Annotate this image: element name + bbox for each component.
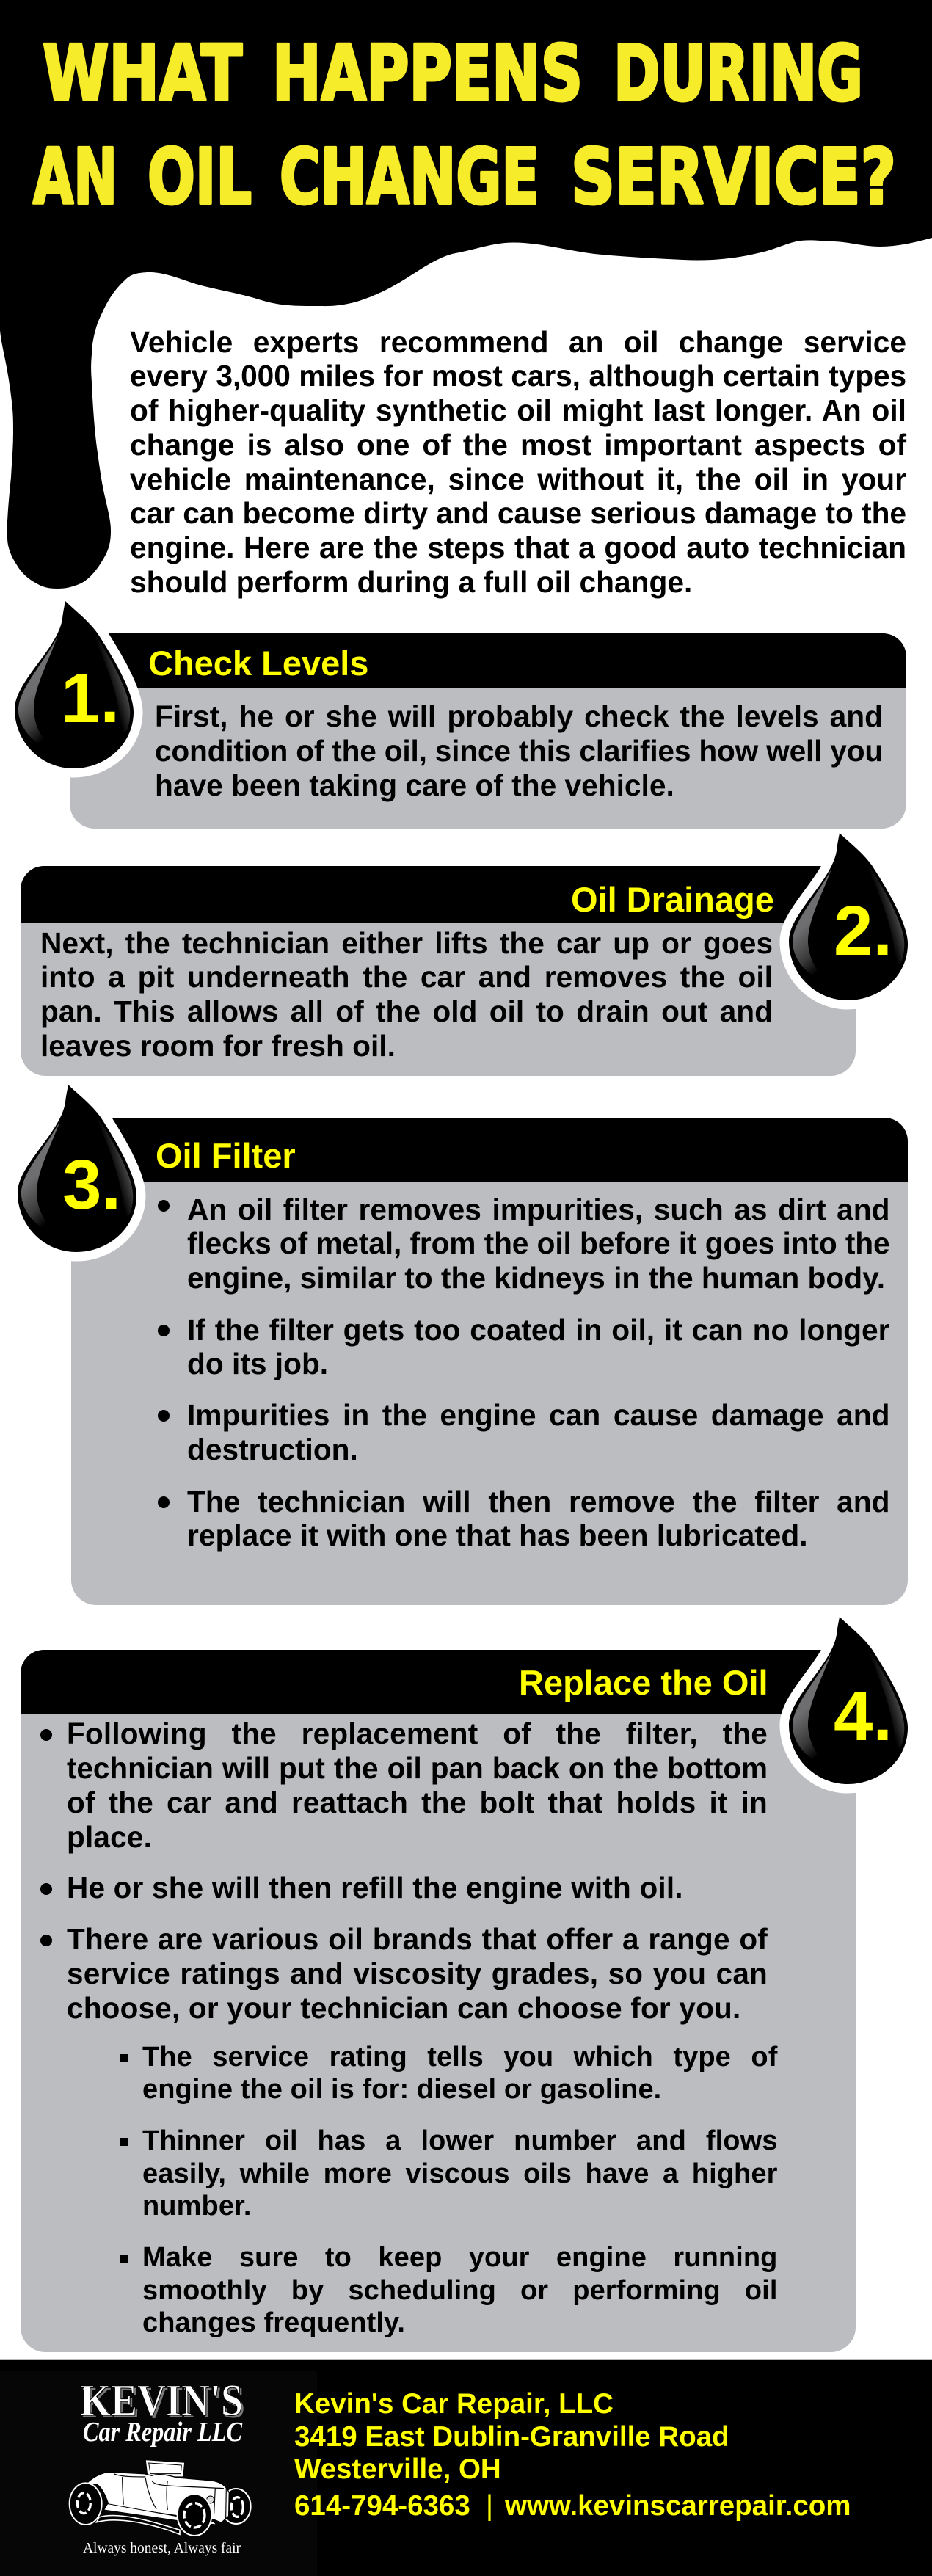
intro text: of higher-quality synthetic oil might last longer. An oil <box>130 393 906 427</box>
sub-bullet 3 <box>120 2255 128 2263</box>
panel: step 4 replace the oil <box>21 1617 908 2352</box>
sub-bullet text 1: The service rating tells you which type of <box>142 2042 778 2073</box>
bullet 3 <box>158 1410 170 1422</box>
logo wordmark KEVIN'S: KEVIN'S <box>82 2379 245 2428</box>
body text: pan. This allows all of the old oil to drain out and <box>40 994 773 1028</box>
body text <box>155 699 883 802</box>
bullet 1 <box>158 1200 170 1212</box>
bullet text 1: An oil filter removes impurities, such as dirt and <box>187 1192 889 1226</box>
body background <box>21 923 856 1076</box>
bullet text 1 <box>187 1192 889 1295</box>
heading: Oil Filter <box>156 1136 296 1175</box>
logo wordmark KEVIN'S: KEVIN'S <box>80 2376 243 2426</box>
bullet text 1: Following the replacement of the filter, the <box>67 1717 768 1750</box>
body background <box>70 688 906 829</box>
bullet 1 <box>40 1729 52 1741</box>
icon: oil drop number 2: 2. <box>834 892 892 970</box>
bullet text 4: The technician will then remove the filter and <box>187 1484 889 1518</box>
bullet text 1: technician will put the oil pan back on the bottom <box>67 1751 768 1785</box>
intro text: engine. Here are the steps that a good auto technician <box>130 531 906 564</box>
header bar <box>21 866 856 923</box>
contact: address: 3419 East Dublin-Granville Road <box>294 2421 729 2453</box>
intro text: car can become dirty and cause serious damage to the <box>130 496 906 530</box>
sub-bullet text 2: number. <box>142 2191 252 2222</box>
contact: phone and website: 614-794-6363 <box>294 2490 470 2522</box>
bullet text 1: engine, similar to the kidneys in the human body. <box>187 1261 885 1295</box>
icon: oil drop number 1: 1. <box>61 659 120 738</box>
bullet text 3 <box>187 1398 889 1466</box>
bullet text 4: replace it with one that has been lubricated. <box>187 1518 808 1552</box>
bullet text 3: choose, or your technician can choose for you. <box>67 1991 740 2025</box>
sub-bullet text 3: changes frequently. <box>142 2307 405 2338</box>
bullet text 3 <box>67 1922 768 2025</box>
bullet text 3: There are various oil brands that offer a range of <box>67 1922 768 1956</box>
logo tagline: Always honest, Always fair <box>83 2540 241 2556</box>
intro text <box>130 324 907 599</box>
panel: step 1 check levels <box>15 601 906 829</box>
body text: have been taking care of the vehicle. <box>155 768 674 802</box>
bullet text 2: If the filter gets too coated in oil, it can no longer <box>187 1312 889 1346</box>
bullet 3 <box>40 1935 52 1946</box>
icon: oil drop number 2 <box>779 833 908 1010</box>
header bar <box>71 1118 908 1182</box>
sub-bullet text 1: engine the oil is for: diesel or gasoline. <box>142 2074 661 2105</box>
contact: company name: Kevin's Car Repair, LLC <box>294 2388 614 2420</box>
bullet text 2 <box>187 1312 889 1380</box>
bullet text 1 <box>67 1717 768 1854</box>
header bar <box>21 1650 856 1714</box>
bullet text 3: service ratings and viscosity grades, so you can <box>67 1957 768 1990</box>
body text <box>40 926 773 1063</box>
bullet text 1: place. <box>67 1820 152 1854</box>
sub-bullet text 3: smoothly by scheduling or performing oil <box>142 2275 778 2306</box>
contact: city: Westerville, OH <box>294 2453 501 2485</box>
panel: step 3 oil filter <box>18 1085 908 1605</box>
body text: First, he or she will probably check the levels and <box>155 699 883 733</box>
intro text: every 3,000 miles for most cars, although certain types <box>130 359 906 393</box>
sub-bullet 2 <box>120 2138 128 2146</box>
sub-bullet text 2: easily, while more viscous oils have a higher <box>142 2158 778 2188</box>
panel: step 2 oil drainage <box>21 833 908 1076</box>
bullet text 2: do its job. <box>187 1347 328 1380</box>
bullet text 3: destruction. <box>187 1433 358 1466</box>
contact: phone and website <box>294 2490 851 2522</box>
icon: oil drop number 3 <box>18 1085 145 1261</box>
oil spill header background <box>0 0 932 589</box>
contact: phone and website: www.kevinscarrepair.com <box>505 2490 851 2522</box>
sub-bullet text 2 <box>142 2125 778 2222</box>
icon: oil drop number 4 <box>779 1617 908 1794</box>
bullet text 3: Impurities in the engine can cause damage and <box>187 1398 889 1432</box>
bullet text 1: of the car and reattach the bolt that holds it in <box>67 1786 768 1819</box>
bullet 4 <box>158 1496 170 1508</box>
body background <box>21 1713 856 2352</box>
bullet 2 <box>158 1325 170 1336</box>
logo: Kevin's Car Repair <box>69 2376 252 2556</box>
sub-bullet text 3: Make sure to keep your engine running <box>142 2242 778 2273</box>
body text: condition of the oil, since this clarifies how well you <box>155 734 883 768</box>
sub-bullet text 1 <box>142 2042 778 2105</box>
heading: Oil Drainage <box>571 880 774 919</box>
contact: phone and website: | <box>486 2490 493 2522</box>
intro text: should perform during a full oil change. <box>130 565 692 599</box>
heading: Replace the Oil <box>519 1663 768 1702</box>
sub-bullet text 3 <box>142 2242 778 2338</box>
title <box>32 37 896 213</box>
intro text: change is also one of the most important aspects of <box>130 428 906 462</box>
body text: Next, the technician either lifts the car up or goes <box>40 926 773 960</box>
bullet 2 <box>40 1883 52 1895</box>
footer <box>0 2359 932 2576</box>
header bar <box>71 633 906 688</box>
intro text: Vehicle experts recommend an oil change service <box>130 324 906 358</box>
body text: into a pit underneath the car and removes the oil <box>40 960 773 994</box>
bullet text 4 <box>187 1484 889 1552</box>
icon: oil drop number 1 <box>15 601 142 778</box>
body background <box>71 1182 908 1605</box>
sub-bullet 1 <box>120 2054 128 2062</box>
bullet text 1: flecks of metal, from the oil before it goes into the <box>187 1226 889 1260</box>
icon: hot rod car <box>70 2461 251 2536</box>
bullet text 2: He or she will then refill the engine with oil. <box>67 1871 683 1904</box>
logo script Car Repair LLC: Car Repair LLC <box>83 2417 243 2448</box>
heading: Check Levels <box>148 644 368 683</box>
icon: oil drop number 3: 3. <box>62 1146 121 1224</box>
body text: leaves room for fresh oil. <box>40 1029 396 1063</box>
icon: oil drop number 4: 4. <box>834 1677 892 1755</box>
sub-bullet text 2: Thinner oil has a lower number and flows <box>142 2125 778 2156</box>
intro text: vehicle maintenance, since without it, the oil in your <box>130 462 906 496</box>
